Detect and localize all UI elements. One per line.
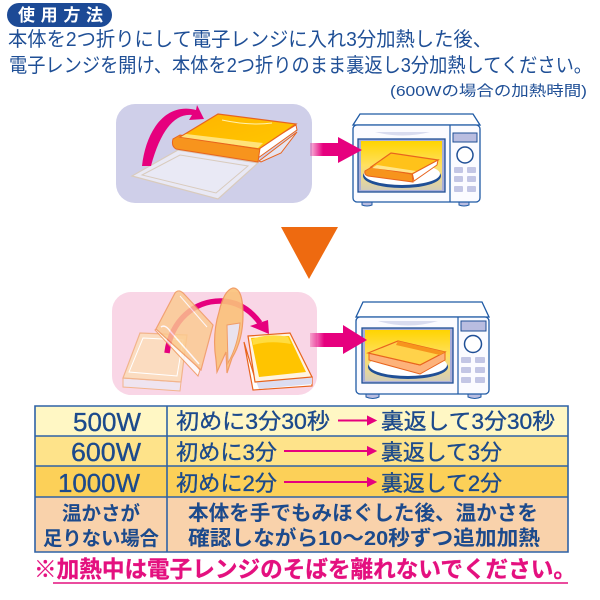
row: 600W: 600W	[71, 437, 141, 467]
row: 600W: 初めに3分	[176, 440, 277, 465]
faded pack on edge	[215, 288, 243, 373]
curved arrow	[167, 301, 260, 353]
row: 600W	[35, 436, 568, 467]
folded pack	[172, 114, 297, 162]
heading pill: 使用方法	[18, 5, 103, 25]
arrow to microwave 2	[310, 325, 367, 354]
warning: ※加熱中は電子レンジのそばを離れないでください。	[34, 556, 576, 582]
row: 500W	[35, 406, 568, 437]
row: 1000W: 初めに2分	[176, 471, 277, 496]
faded pack lying flat	[123, 333, 187, 391]
heading pill	[7, 3, 112, 27]
row: if not warm enough: 本体を手でもみほぐした後、温かさを	[188, 502, 538, 525]
panel: fold the body in two	[116, 104, 312, 203]
row: if not warm enough: 足りない場合	[43, 528, 159, 550]
microwave 2	[356, 302, 489, 398]
heating time table	[35, 406, 568, 552]
pack after turning over	[244, 333, 312, 390]
row: 600W: 裏返して3分	[381, 440, 502, 465]
panel: turn the pack over	[112, 288, 317, 395]
row: 1000W	[35, 466, 568, 498]
microwave 1	[353, 114, 480, 206]
row: 500W: 500W	[73, 407, 141, 437]
row: 1000W: 裏返して2分	[381, 471, 502, 496]
row: if not warm enough: 確認しながら10～20秒ずつ追加加熱	[188, 526, 541, 550]
instruction text: 本体を2つ折りにして電子レンジに入れ3分加熱した後、	[8, 28, 492, 51]
arrow to microwave 1	[310, 137, 362, 163]
arrow: next step	[281, 227, 338, 279]
instruction text	[8, 28, 592, 77]
row: 1000W: 1000W	[58, 468, 140, 498]
row: 500W: 初めに3分30秒	[176, 409, 330, 434]
note: heating time at 600W: (600Wの場合の加熱時間)	[390, 83, 587, 100]
pack on plate	[368, 341, 445, 374]
faded pack tilted	[155, 291, 213, 376]
pack on plate	[365, 153, 438, 182]
flat sheet	[132, 150, 258, 199]
row: if not warm enough: 温かさが	[62, 502, 140, 525]
row: 500W: 裏返して3分30秒	[381, 409, 555, 434]
curved arrow	[142, 105, 204, 166]
row: if not warm enough	[35, 497, 568, 552]
